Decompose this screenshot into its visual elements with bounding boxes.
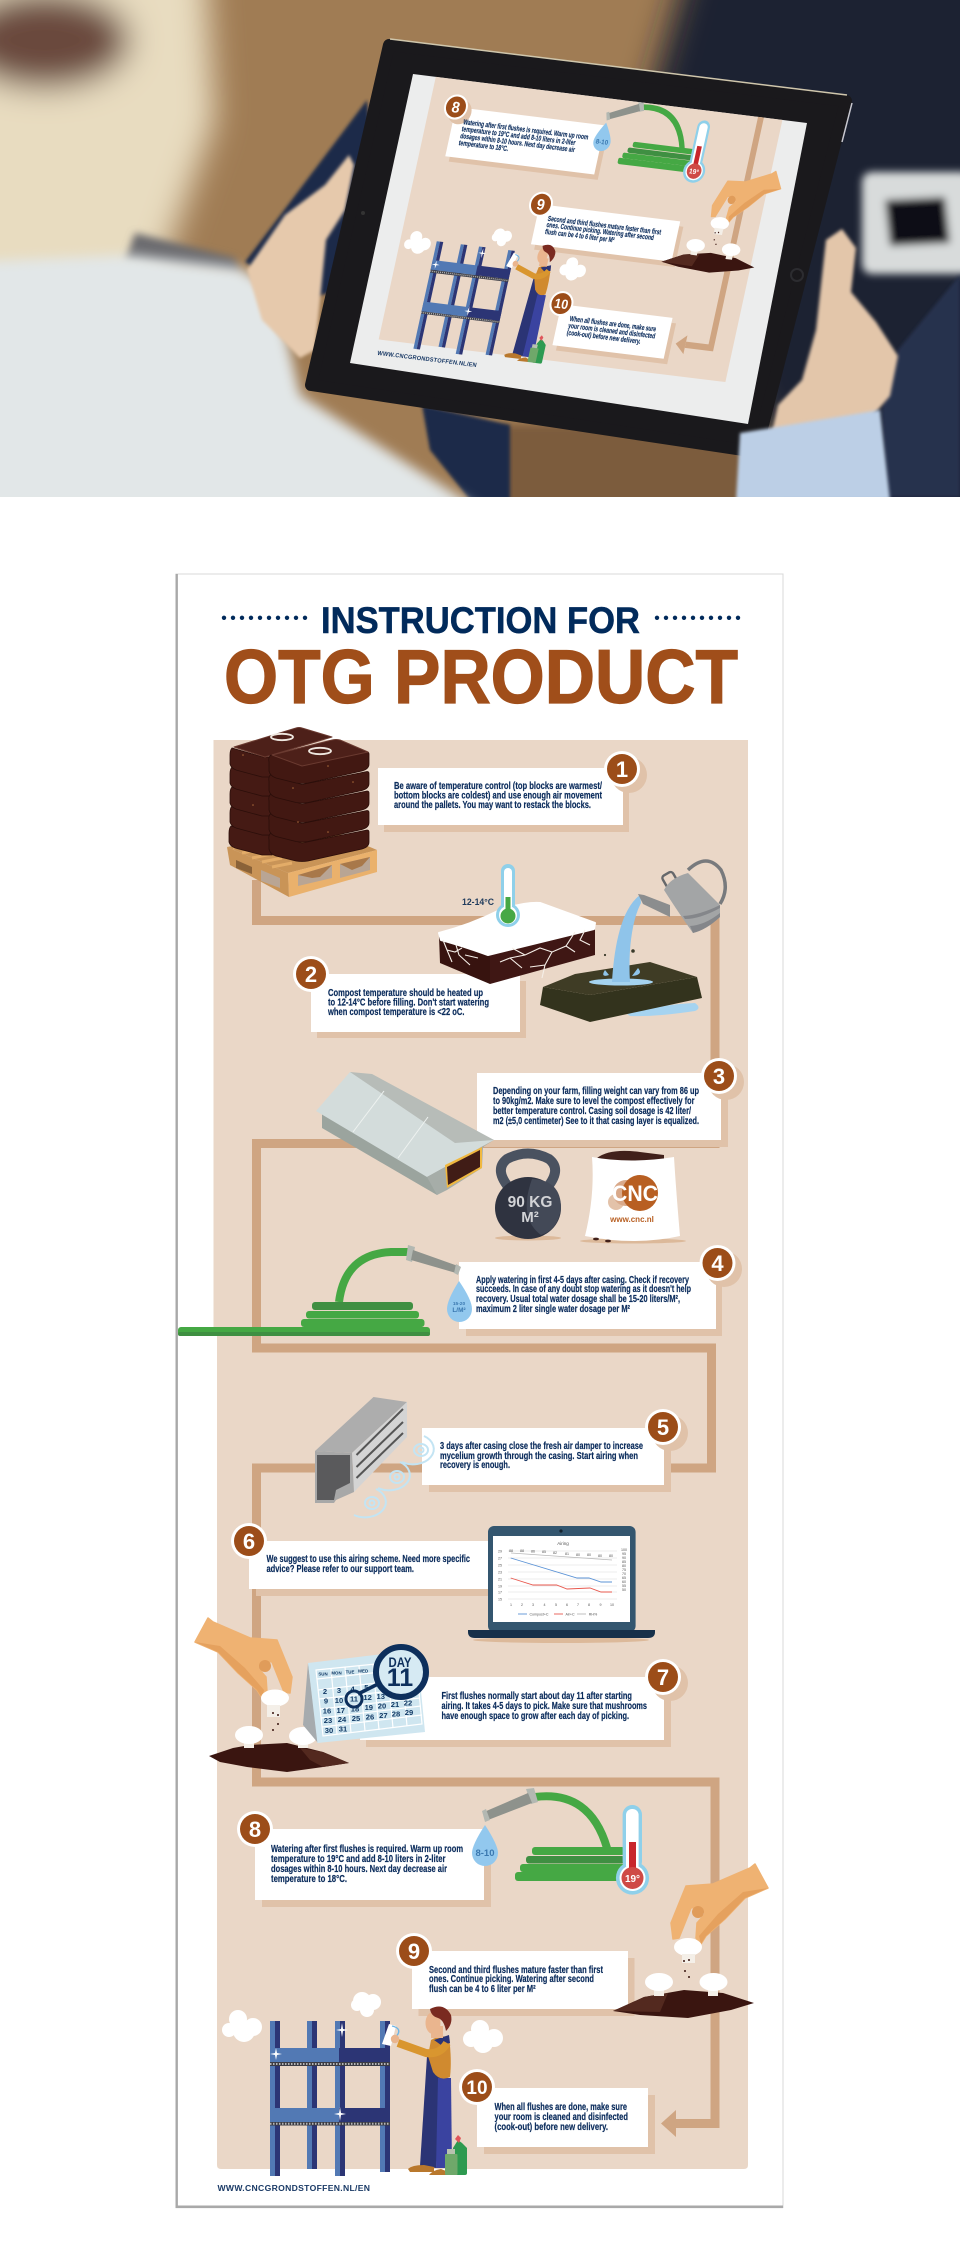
calendar dates: 2 — [323, 1687, 327, 1696]
step 2: 2 — [305, 962, 317, 987]
step 6: We suggest to use this airing scheme. Need more specific — [266, 1554, 470, 1565]
step 9: ones. Continue picking. Watering after second — [429, 1974, 594, 1985]
airing chart: 88 — [520, 1549, 524, 1553]
step 9: Second and third flushes mature faster than first — [429, 1965, 603, 1976]
calendar dates: 24 — [338, 1715, 347, 1724]
step 3: Depending on your farm, filling weight can vary from 86 up — [493, 1086, 699, 1097]
calendar weekdays: SUN — [318, 1672, 328, 1676]
head — [426, 2012, 440, 2034]
hand — [195, 1618, 292, 1698]
step 6: 6 — [243, 1529, 255, 1554]
step 10: 10 — [466, 2078, 488, 2099]
sprayer — [382, 2024, 396, 2046]
calendar dates: 5 — [364, 1683, 369, 1692]
icon: hand picking mushrooms, step 9 — [613, 1864, 768, 2018]
airing chart: Air+C — [565, 1612, 575, 1616]
airing chart: 80 — [576, 1553, 580, 1557]
puddle — [627, 1003, 698, 1016]
step 1: Be aware of temperature control (top blocks are warmest/ — [394, 781, 602, 792]
pallet — [227, 830, 377, 897]
step 5 — [422, 1409, 688, 1492]
step 5: recovery is enough. — [440, 1460, 510, 1471]
step 4: 4 — [711, 1251, 724, 1276]
process route with arrow — [256, 880, 715, 2137]
fingers over the tablet edge — [772, 229, 898, 442]
step 8: 8 — [249, 1817, 261, 1842]
step 10: your room is cleaned and disinfected — [494, 2112, 628, 2123]
step 7: 7 — [657, 1665, 669, 1690]
airing chart: 5 — [555, 1603, 557, 1607]
step 1 — [378, 751, 647, 832]
airing chart: Airing — [557, 1541, 569, 1546]
icon: calendar day 11: TUE — [346, 1670, 354, 1674]
watering can — [638, 861, 725, 933]
step 4 — [459, 1245, 742, 1336]
airing chart: 82 — [553, 1551, 557, 1555]
step 1: 1 — [616, 757, 628, 782]
lower mushrooms — [654, 1987, 664, 1996]
step 10: When all flushes are done, make sure — [494, 2102, 627, 2113]
water puddle on block — [589, 978, 653, 986]
step 5: mycelium growth through the casing. Start airing when — [440, 1451, 638, 1462]
hand — [671, 1864, 768, 1944]
icon: hose and drop, step 8: 8-10 — [475, 1848, 495, 1859]
tablet step 8 — [444, 94, 604, 180]
step 2: Compost temperature should be heated up — [328, 988, 483, 999]
airing chart: 90 — [622, 1556, 626, 1560]
step 8 — [237, 1811, 491, 1907]
step 9: flush can be 4 to 6 liter per M² — [429, 1984, 536, 1995]
beige panel — [214, 740, 748, 2169]
tablet step 9: ones. Continue picking. Watering after second — [546, 221, 655, 242]
airing chart: 10 — [610, 1603, 614, 1607]
calendar dates: 4 — [350, 1684, 355, 1694]
airing chart: 25 — [498, 1564, 502, 1568]
blurred background shapes — [0, 0, 960, 540]
airing chart — [498, 1541, 627, 1616]
jeans behind left hand — [244, 99, 370, 298]
calendar dates: 21 — [391, 1700, 400, 1709]
tablet step 9: flush can be 4 to 6 liter per M² — [544, 228, 616, 244]
calendar dates: 22 — [404, 1698, 412, 1708]
step 3: to 90kg/m2. Make sure to level the compost effectively for — [493, 1096, 694, 1107]
tablet step 10: When all flushes are done, make sure — [569, 315, 657, 334]
icon: CNC casing bag — [580, 1151, 686, 1244]
step 4: recovery. Usual total water dosage shall be 15-20 liters/M², — [476, 1294, 680, 1305]
air swirls — [354, 1436, 434, 1517]
torso — [428, 2036, 451, 2079]
CNC logo: CNC — [612, 1181, 658, 1206]
phone on the table — [862, 172, 960, 274]
shirt sleeve — [736, 410, 890, 500]
label: temperature: 12-14°C — [462, 897, 494, 908]
calendar dates: 9 — [324, 1696, 328, 1706]
back stack — [229, 748, 272, 855]
right dotted rule — [655, 616, 740, 620]
step 5: 5 — [657, 1415, 669, 1440]
arm — [398, 2043, 447, 2053]
step 2: when compost temperature is <22 oC. — [327, 1007, 465, 1018]
front stack — [269, 752, 369, 862]
tablet screen content — [378, 76, 782, 382]
calendar dates: 3 — [337, 1686, 341, 1695]
calendar grid — [316, 1660, 422, 1736]
calendar dates: 23 — [324, 1716, 332, 1725]
icon: compost block with mycelium — [439, 903, 595, 984]
table below the tablet — [506, 422, 740, 497]
airing chart: 80 — [598, 1554, 602, 1558]
icon: CNC casing bag: www.cnc.nl — [609, 1215, 654, 1224]
magnifier: DAY — [388, 1654, 412, 1670]
icon: coiled hose with water drop: 15-20 — [453, 1301, 465, 1307]
airing chart: 88 — [509, 1549, 513, 1553]
calendar dates: 12 — [363, 1693, 372, 1702]
airing chart: 95 — [622, 1552, 626, 1556]
airing chart: 21 — [498, 1578, 502, 1582]
airing chart: 70 — [622, 1572, 626, 1576]
tablet step 10 — [550, 291, 676, 364]
calendar dates: 28 — [392, 1710, 400, 1718]
tablet step 10: your room is cleaned and disinfected — [567, 322, 656, 341]
calendar dates: 27 — [379, 1711, 388, 1720]
airing chart: 75 — [622, 1568, 626, 1572]
step 7: have enough space to grow after each day of picking. — [442, 1711, 629, 1722]
airing chart: 60 — [622, 1580, 626, 1584]
tablet step 9 — [519, 190, 687, 267]
icon: thermometer 19 degrees: 19° — [625, 1874, 640, 1885]
step 2 — [293, 956, 526, 1038]
step 4: succeeds. In case of any doubt stop watering as it doesn't help — [476, 1284, 691, 1295]
step 10 — [459, 2069, 655, 2154]
icon: calendar day 11: MON — [331, 1670, 342, 1676]
tablet step 9: Second and third flushes mature faster than first — [547, 215, 662, 237]
right jeans — [882, 275, 960, 497]
airing chart: 7 — [577, 1603, 579, 1607]
airing chart: 100 — [621, 1548, 627, 1552]
step 9: 9 — [408, 1939, 420, 1964]
calendar dates: 20 — [378, 1702, 386, 1710]
icon: calendar day 11 — [303, 1647, 426, 1743]
step 4: maximum 2 liter single water dosage per M² — [476, 1304, 630, 1315]
step 3 — [477, 1058, 744, 1147]
wet block — [540, 987, 590, 1022]
sparkles — [270, 2023, 348, 2121]
tablet step 9: 9 — [535, 196, 547, 214]
icon: growing room building — [316, 1072, 494, 1195]
left hand — [247, 155, 354, 358]
airing chart: 3 — [532, 1603, 534, 1607]
calendar dates: 13 — [376, 1692, 385, 1701]
calendar dates: 18 — [351, 1704, 359, 1714]
airing chart: 27 — [498, 1556, 502, 1560]
calendar dates: 26 — [366, 1712, 374, 1722]
shoes — [408, 2165, 434, 2172]
calendar dates: 11 — [350, 1694, 359, 1704]
icon: kettlebell 90 kg: M² — [521, 1209, 539, 1226]
airing chart: 29 — [498, 1550, 502, 1554]
airing chart: 85 — [622, 1560, 626, 1564]
step 9 — [396, 1933, 634, 2016]
icon: calendar day 11: WED — [358, 1668, 368, 1674]
airing chart: 80 — [622, 1564, 626, 1568]
tablet — [311, 39, 852, 452]
icon: steam clouds — [222, 1992, 503, 2053]
heading text: INSTRUCTION FOR — [321, 600, 640, 641]
soil — [613, 1990, 754, 2018]
legs — [420, 2056, 440, 2168]
title: instruction for — [222, 600, 740, 641]
lower mushrooms — [244, 1740, 254, 1748]
arrow head — [661, 2110, 676, 2137]
mycelium roots — [443, 930, 590, 978]
airing chart: Compost+C — [529, 1612, 549, 1616]
overall strap — [434, 2035, 450, 2045]
airing chart: 19 — [498, 1584, 502, 1588]
airing chart: 80 — [587, 1553, 591, 1557]
tablet footer url: WWW.CNCGRONDSTOFFEN.NL/EN — [377, 351, 477, 369]
magnifier: 11 — [387, 1664, 413, 1692]
soil — [209, 1743, 349, 1772]
airing chart: 9 — [600, 1603, 602, 1607]
calendar dates — [323, 1683, 413, 1735]
calendar dates: 25 — [352, 1714, 361, 1723]
icon: coiled hose with water drop — [178, 1245, 472, 1336]
airing chart: 23 — [498, 1570, 502, 1574]
specks — [242, 754, 354, 833]
icon: kettlebell 90 kg — [495, 1154, 561, 1240]
step 8: dosages within 8-10 hours. Next day decrease air — [271, 1864, 447, 1875]
tablet step 8: dosages within 8-10 hours. Next day decrease air — [459, 132, 576, 154]
airing chart: 1 — [510, 1603, 512, 1607]
calendar dates: 31 — [339, 1724, 348, 1734]
step 2: to 12-14°C before filling. Don't start watering — [328, 998, 489, 1008]
tablet step 8: Watering after first flushes is required. Warm up room — [462, 118, 589, 142]
door — [445, 1147, 482, 1188]
calendar dates: 17 — [336, 1706, 345, 1715]
step 3: 3 — [713, 1064, 725, 1089]
step 8: temperature to 19°C and add 8-10 liters in 2-liter — [271, 1854, 446, 1865]
step 7: airing. It takes 4-5 days to pick. Make sure that mushrooms — [442, 1701, 647, 1712]
icon: hose and drop, step 8 — [472, 1788, 625, 1881]
picked mushroom — [261, 1690, 289, 1706]
step 7: First flushes normally start about day 11 after starting — [442, 1691, 632, 1702]
nozzle — [406, 1245, 415, 1262]
step 1: around the pallets. You may want to restack the blocks. — [394, 800, 591, 811]
icon: pallet with compost blocks — [227, 728, 377, 897]
airing chart: 15 — [498, 1598, 502, 1602]
calendar dates: 30 — [325, 1726, 333, 1735]
tablet step 8: 8 — [450, 99, 462, 117]
icon: worker with bottles — [382, 2007, 467, 2175]
title: OTG product: OTG PRODUCT — [224, 635, 738, 720]
icon: soaked block and watering can — [540, 861, 725, 1022]
infographic card — [176, 574, 783, 2208]
icon: hand picking mushrooms on soil — [195, 1618, 349, 1772]
airing chart: 80 — [609, 1554, 613, 1558]
airing chart: RH% — [589, 1612, 598, 1616]
calendar dates: 19 — [365, 1703, 373, 1712]
picked mushroom — [674, 1938, 702, 1956]
airing chart: 65 — [622, 1576, 626, 1580]
step 6: advice? Please refer to our support team. — [266, 1564, 414, 1575]
bottles — [453, 2140, 467, 2175]
airing chart: 6 — [566, 1603, 568, 1607]
shirt — [0, 255, 480, 510]
calendar dates: 29 — [405, 1708, 413, 1717]
icon: thermometer green — [496, 864, 520, 927]
photo: person holding tablet — [0, 0, 960, 540]
airing chart: 17 — [498, 1590, 502, 1594]
step 6 — [231, 1523, 495, 1596]
calendar dates: 16 — [323, 1706, 331, 1716]
airing chart: 2 — [521, 1603, 523, 1607]
airing chart: 86 — [531, 1550, 535, 1554]
icon: air conditioning unit with swirls — [315, 1397, 434, 1517]
step 3: better temperature control. Casing soil dosage is 42 liter/ — [493, 1106, 691, 1117]
icon: cleaned shelving rack — [270, 2021, 390, 2176]
step 1: bottom blocks are coldest) and use enough air movement — [394, 790, 602, 802]
airing chart: 4 — [544, 1603, 546, 1607]
airing chart: 85 — [542, 1550, 546, 1554]
airing chart: 8 — [588, 1603, 590, 1607]
tablet step 10: 10 — [553, 295, 570, 312]
magnifier — [346, 1647, 426, 1707]
icon: kettlebell 90 kg: 90 KG — [508, 1194, 552, 1211]
step 10: (cook-out) before new delivery. — [494, 2122, 608, 2133]
tablet step 8: temperature to 19°C and add 8-10 liters in 2-liter — [461, 125, 576, 147]
step 4: Apply watering in first 4-5 days after casing. Check if recovery — [476, 1275, 689, 1286]
tablet step 10: (cook-out) before new delivery. — [566, 329, 642, 346]
tablet step 8: temperature to 18°C. — [458, 139, 509, 153]
icon: thermometer 19 degrees — [616, 1805, 649, 1895]
footer url: WWW.CNCGRONDSTOFFEN.NL/EN — [218, 2183, 370, 2193]
airing chart: 81 — [565, 1552, 569, 1556]
calendar dates: 10 — [335, 1696, 343, 1705]
icon: coiled hose with water drop: L/M² — [452, 1307, 467, 1314]
icon: laptop with airing chart — [468, 1526, 655, 1643]
airing chart: 50 — [622, 1588, 626, 1592]
step 8: Watering after first flushes is required. Warm up room — [271, 1844, 463, 1855]
step 7 — [360, 1659, 688, 1747]
airing chart: 55 — [622, 1584, 626, 1588]
left dotted rule — [222, 616, 307, 620]
step 5: 3 days after casing close the fresh air damper to increase — [440, 1441, 643, 1452]
water drop — [447, 1281, 472, 1322]
step 8: temperature to 18°C. — [271, 1874, 347, 1885]
step 3: m2 (±5,0 centimeter) See to it that casing layer is equalized. — [493, 1116, 699, 1127]
